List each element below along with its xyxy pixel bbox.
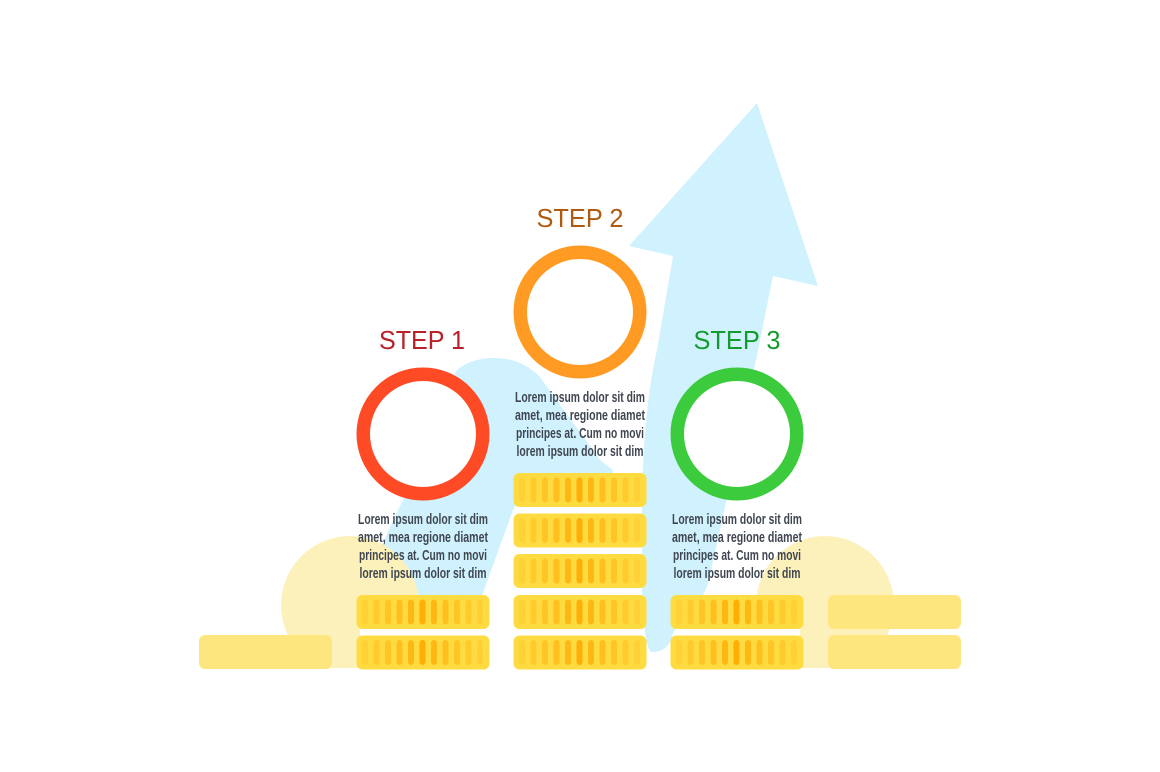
pale coin circle left [281, 536, 419, 674]
faded coin left [199, 635, 332, 669]
step 3 text [672, 512, 802, 582]
step 2 heading: STEP 2 [536, 203, 624, 233]
step 1 text [358, 512, 488, 582]
step 2 text: lorem ipsum dolor sit dim [516, 444, 644, 460]
step 1 ring [363, 374, 483, 494]
faded coins right [828, 595, 961, 669]
step 1 text: amet, mea regione diamet [358, 530, 488, 546]
step 2 text: principes at. Cum no movi [516, 426, 644, 442]
background growth arrow [355, 103, 818, 652]
step 2 text [515, 390, 645, 460]
step 1 text: principes at. Cum no movi [359, 548, 487, 564]
step 1 text: lorem ipsum dolor sit dim [360, 566, 486, 582]
step 3 text: principes at. Cum no movi [673, 548, 801, 564]
step 3 text: amet, mea regione diamet [672, 530, 802, 546]
pale coin circle right [756, 536, 894, 674]
step 1 heading: STEP 1 [379, 325, 465, 355]
coin stack 1 [356, 595, 490, 670]
step 3 text: lorem ipsum dolor sit dim [674, 566, 800, 582]
step 2 text: Lorem ipsum dolor sit dim [515, 390, 645, 406]
step 2 ring [520, 252, 640, 372]
step 3 heading: STEP 3 [694, 325, 780, 355]
step 1 text: Lorem ipsum dolor sit dim [358, 512, 488, 528]
coin stack 3 [670, 595, 804, 670]
step 3 text: Lorem ipsum dolor sit dim [672, 512, 802, 528]
step 3 ring [677, 374, 797, 494]
coin stack 2 [514, 473, 646, 670]
step 2 text: amet, mea regione diamet [515, 408, 645, 424]
